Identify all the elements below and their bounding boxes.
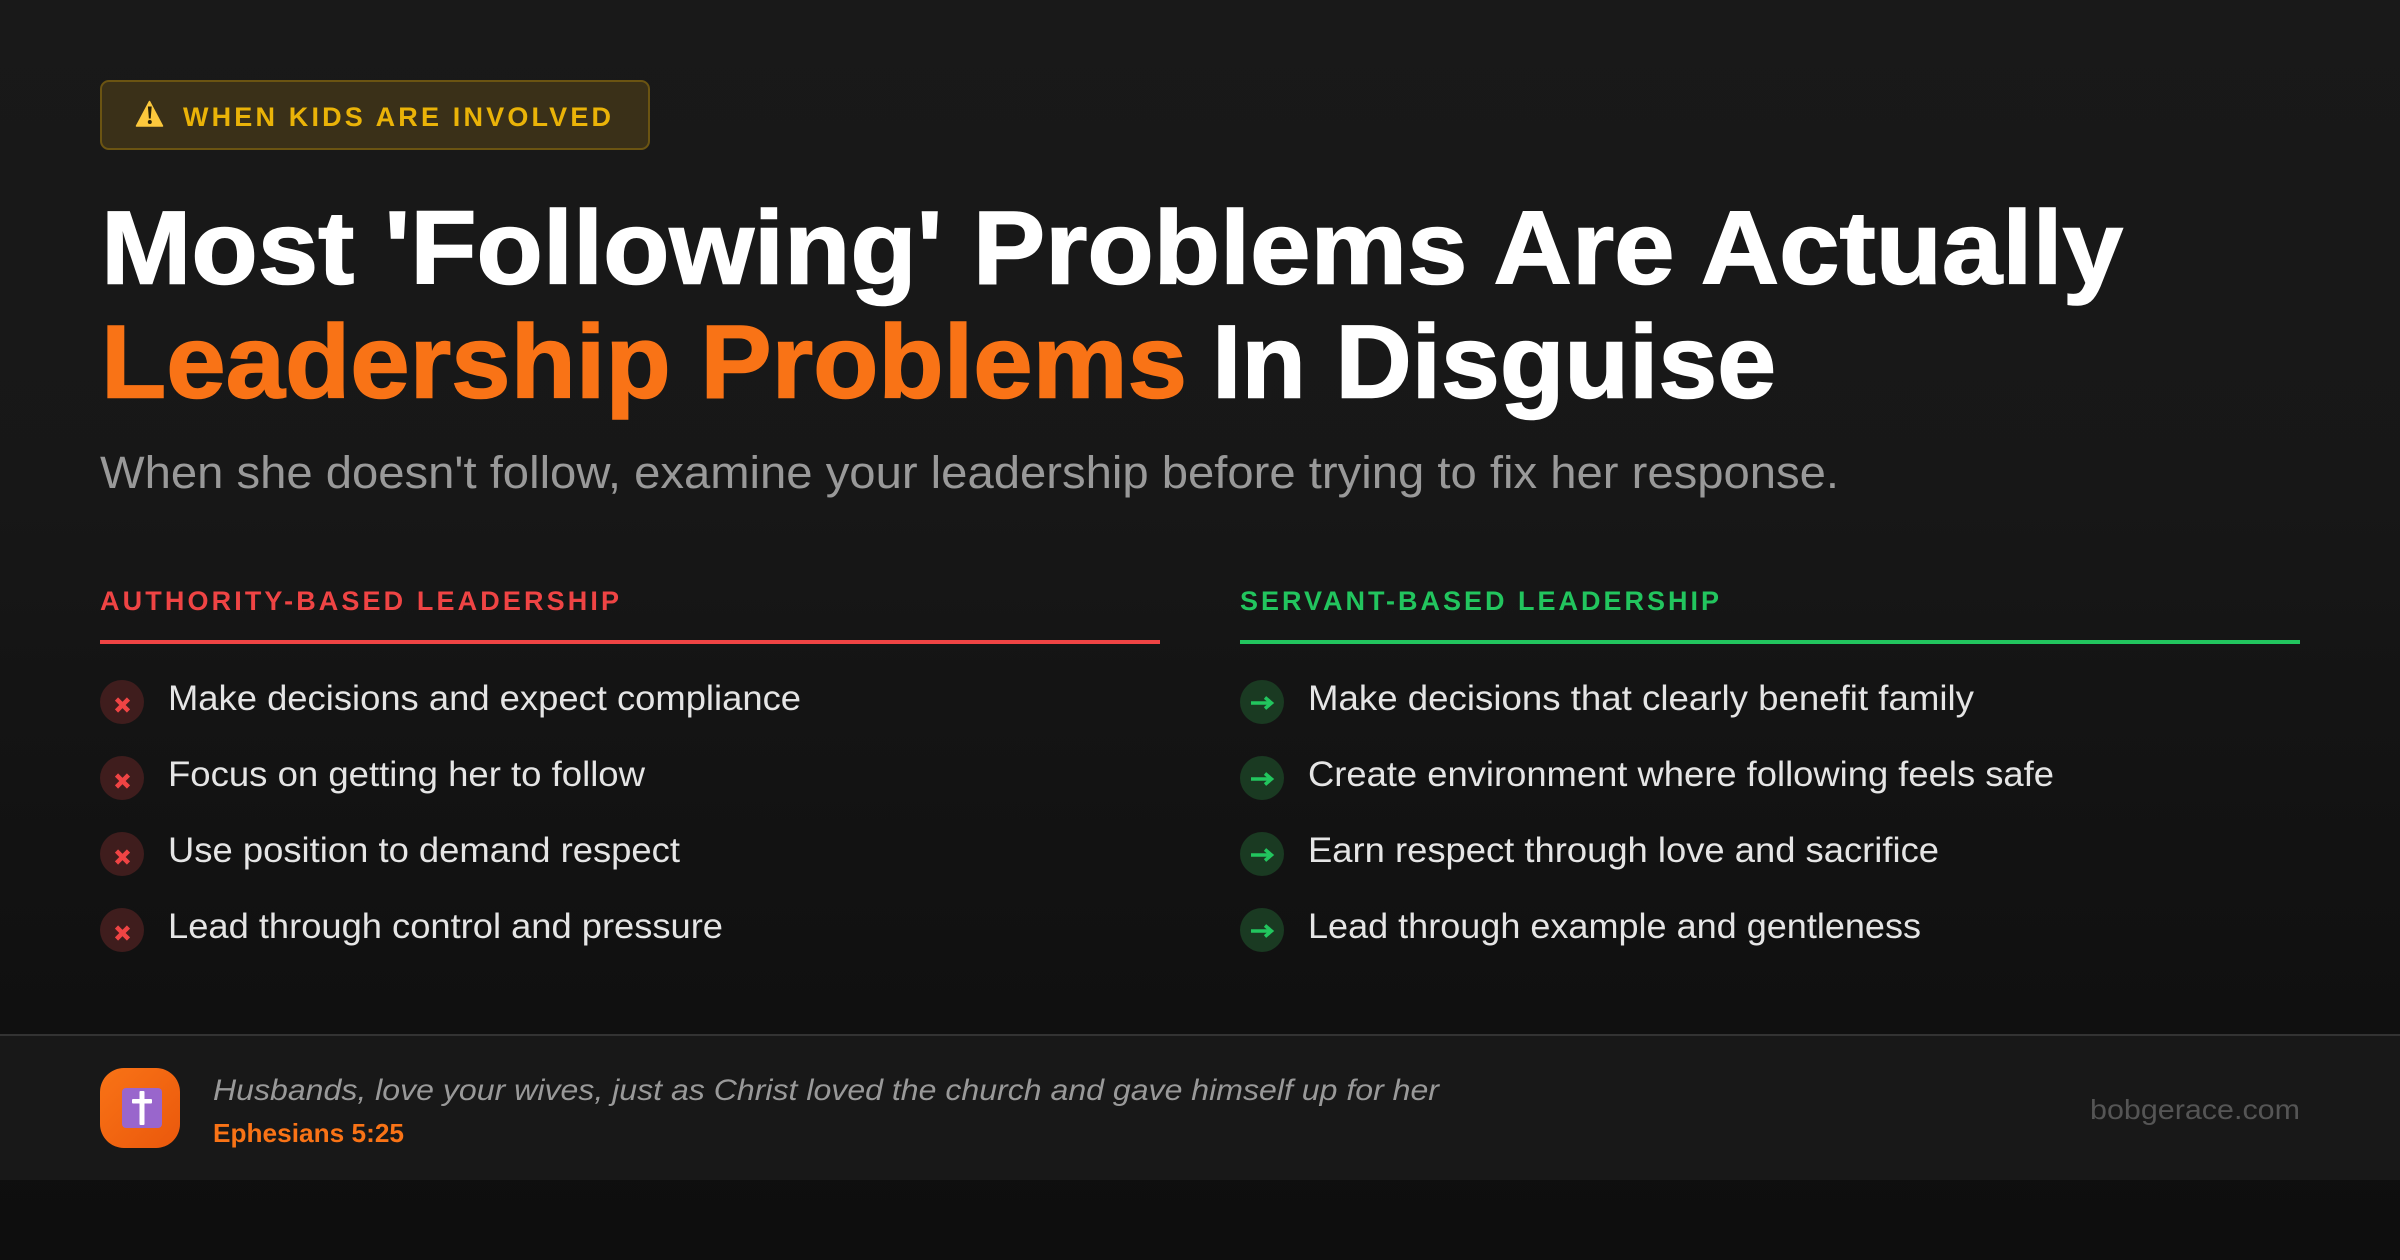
item: focus on getting her to follow: Focus on getting her to follow [168, 755, 646, 794]
item: make decisions that clearly benefit family: Make decisions that clearly benefit family [1308, 679, 1975, 718]
title: Leadership Problems [101, 304, 1187, 420]
scripture reference: Ephesians 5:25 [213, 1118, 404, 1148]
icon: cross [100, 1068, 180, 1148]
badge label: WHEN KIDS ARE INVOLVED [183, 102, 611, 132]
item: use position to demand respect: Use position to demand respect [168, 831, 680, 870]
badge: when kids are involved [101, 81, 649, 149]
scripture quote: Husbands, love your wives, just as Christ loved the church and gave himself up for her [213, 1074, 1440, 1107]
icon: warning triangle [136, 102, 162, 126]
panel: servant-based leadership [1240, 586, 2300, 952]
title [101, 190, 2123, 420]
heading: servant-based: SERVANT-BASED LEADERSHIP [1240, 586, 1719, 616]
title: Most 'Following' Problems Are Actually [101, 190, 2123, 306]
panel: authority-based leadership [100, 586, 1160, 952]
item: lead through example and gentleness: Lead through example and gentleness [1308, 907, 1921, 946]
subtitle: When she doesn't follow, examine your leadership before trying to fix her response. [100, 447, 1839, 498]
item: create environment where following feels safe: Create environment where following feels safe [1308, 755, 2054, 794]
item: make decisions and expect compliance: Make decisions and expect compliance [168, 679, 801, 718]
website: bobgerace.com [2090, 1094, 2300, 1125]
item: lead through control and pressure: Lead through control and pressure [168, 907, 723, 946]
footer bar [0, 1034, 2400, 1180]
title: In Disguise [1212, 304, 1776, 420]
heading: authority-based: AUTHORITY-BASED LEADERSHIP [100, 586, 619, 616]
item: earn respect through love and sacrifice: Earn respect through love and sacrifice [1308, 831, 1939, 870]
